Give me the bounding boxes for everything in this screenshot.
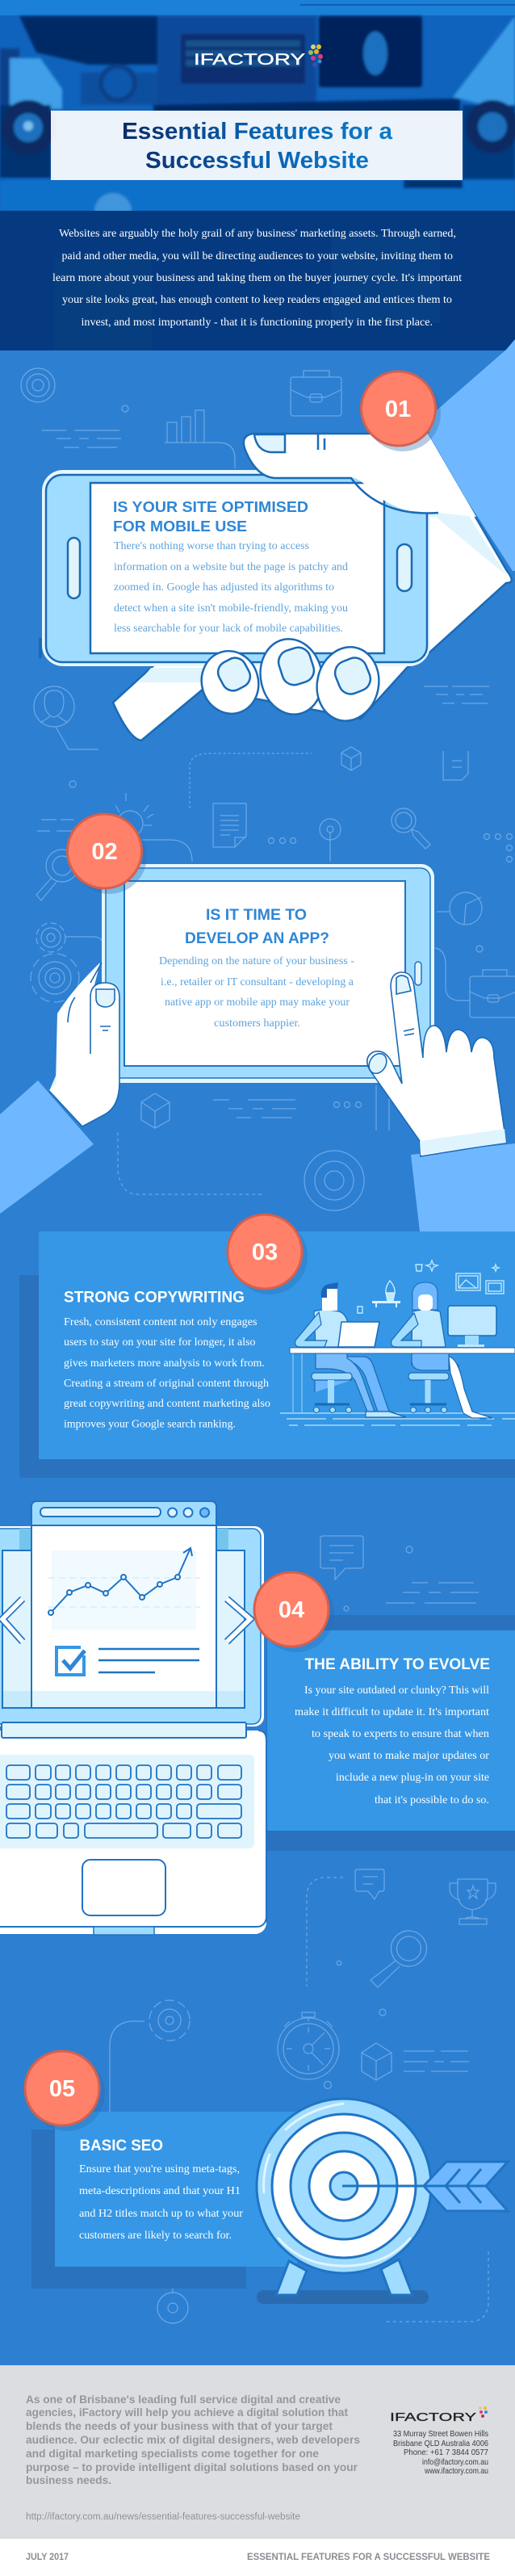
keyboard [0,1755,254,1848]
person: man with laptop [295,1282,406,1417]
intro band: invest, and most importantly - that it is functioning properly in the first place. [81,316,433,328]
text: copywriting body: improves your Google search ranking. [64,1418,236,1429]
hand: left [49,963,119,1126]
heading: app [185,907,329,947]
text: about ifactory: purpose – to provide intelligent digital solutions based on your [26,2461,358,2473]
logo: iFactory footer: IFACTORY [390,2410,476,2424]
text: app body: customers happier. [214,1017,300,1029]
title box: Essential Features for a [122,119,393,145]
badge 01: 01 [385,396,411,422]
fingers [195,633,386,727]
intro band: paid and other media, you will be directing audiences to your website, inviting them to [61,250,453,262]
hand: right [366,972,506,1156]
tablet [102,864,434,1083]
text: copywriting body: Fresh, consistent content not only engages [64,1315,257,1328]
text: copywriting body: great copywriting and content marketing also [64,1397,270,1409]
heading: app: DEVELOP AN APP? [185,930,329,947]
badge 05: 05 [49,2076,75,2102]
title box: Successful Website [145,148,369,174]
panel: strong copywriting [19,1215,515,1478]
text: contact details [393,2429,488,2476]
section 4 background icons [320,1536,479,1611]
text: mobile body: less searchable for your lack of mobile capabilities. [114,622,343,634]
text: seo body: customers are likely to search for. [79,2229,232,2241]
sleeve: right [411,1143,515,1231]
text: evolve body [295,1684,490,1806]
desk [290,1348,515,1353]
text: source url: http://ifactory.com.au/news/essential-features-successful-website [26,2512,300,2522]
panel: develop an app [0,814,515,1231]
intro band: learn more about your business and taking them on the buyer journey cycle. It's important [52,271,462,283]
text: about ifactory: blends the needs of your business with that of your target [26,2419,333,2432]
text: evolve body: include a new plug-in on your site [336,1771,489,1783]
text: contact details: 33 Murray Street Bowen Hills [393,2429,488,2439]
text: contact details: Phone: +61 7 3844 0577 [404,2448,488,2457]
title box [51,111,463,180]
panel: ability to evolve [266,1615,515,1851]
badge 03 [228,1215,308,1294]
text: copywriting body: Creating a stream of original content through [64,1377,269,1389]
text: about ifactory [26,2393,360,2486]
section 1 background icons [21,368,489,780]
text: evolve body: Is your site outdated or clunky? This will [304,1684,489,1696]
icon: target with arrow [257,2099,508,2304]
text: seo body: Ensure that you're using meta-tags, [79,2163,240,2175]
text: app body: i.e., retailer or IT consultant - developing a [161,975,354,988]
section 2 background icons [31,753,515,1210]
badge 02: 02 [91,839,118,865]
text: evolve body: that it's possible to do so. [375,1794,489,1806]
phone [39,470,430,666]
intro band: Websites are arguably the holy grail of any business' marketing assets. Through earned, [59,227,456,239]
text: copywriting body: gives marketers more analysis to work from. [64,1357,265,1369]
checklist [57,1647,199,1675]
text: mobile body: detect when a site isn't mobile-friendly, making you [114,602,348,614]
heading: app: IS IT TIME TO [206,907,307,924]
logo: iFactory header [194,44,323,69]
text: seo body [79,2163,244,2241]
illustration: two people at a desk [280,1261,515,1425]
text: date: JULY 2017 [26,2551,69,2562]
text: copywriting body [64,1315,270,1429]
intro band: your site looks great, has enough content to keep readers engaged and entices them to [62,293,452,305]
badge 05 [25,2051,105,2131]
text: evolve body: to speak to experts to ensure that when [312,1727,489,1739]
text: app body: native app or mobile app may make your [165,996,350,1008]
badge 04: 04 [278,1597,304,1623]
text: about ifactory: and digital marketing specialists come together for one [26,2447,319,2460]
line chart [48,1548,200,1630]
thumb: top [244,434,476,517]
logo: iFactory footer [390,2406,488,2424]
hinge [2,1722,246,1738]
text: about ifactory: business needs. [26,2473,111,2486]
logo: iFactory header: IFACTORY [194,52,305,69]
heading: copywriting: STRONG COPYWRITING [64,1289,245,1307]
text: contact details: www.ifactory.com.au [424,2466,488,2476]
text: evolve body: you want to make major updates or [329,1749,490,1761]
badge 04 [254,1572,334,1652]
text: footer title: ESSENTIAL FEATURES FOR A SUCCESSFUL WEBSITE [247,2551,490,2562]
text: seo body: and H2 titles match up to what your [79,2207,244,2219]
icon: browser window [31,1501,216,1708]
text: mobile body: There's nothing worse than trying to access [114,539,309,552]
heading: seo: BASIC SEO [79,2138,163,2154]
text: app body: Depending on the nature of your business - [159,954,355,967]
text: mobile body [114,539,348,634]
icon: plant and shelf [372,1281,400,1307]
text: mobile body: zoomed in. Google has adjusted its algorithms to [114,581,334,593]
heading: evolve: THE ABILITY TO EVOLVE [305,1656,490,1673]
sleeve: top right [427,339,515,571]
text: contact details: info@ifactory.com.au [422,2457,488,2467]
hand: holding phone [113,434,512,740]
badge 01 [362,371,441,451]
text: app body [159,954,355,1029]
icon: picture frames and sparkles [358,1261,504,1313]
badge 03: 03 [252,1240,278,1265]
panel: basic seo [25,2051,508,2304]
intro band [0,211,515,350]
text: contact details: Brisbane QLD Australia 4006 [393,2439,488,2448]
person: woman with monitor [391,1282,496,1418]
heading: mobile: FOR MOBILE USE [113,518,247,535]
laptop base [0,1731,266,1935]
panel: mobile optimisation [39,339,515,740]
sleeve: left [0,1080,94,1214]
section 5 background icons [110,1869,496,2323]
footer panel [0,2365,515,2576]
text: about ifactory: audience. Our eclectic mix of digital designers, web developers [26,2433,360,2446]
text: about ifactory: agencies, iFactory will help you achieve a digital solution that [26,2406,348,2419]
header photo [0,0,515,230]
text: evolve body: make it difficult to update it. It's important [295,1705,489,1718]
text: about ifactory: As one of Brisbane's leading full service digital and creative [26,2393,341,2406]
arrow: chevrons [2,1599,250,1642]
text: seo body: meta-descriptions and that your H1 [79,2184,241,2196]
laptop illustration [0,1501,334,1935]
laptop lid [0,1526,264,1726]
text: mobile body: information on a website but the page is patchy and [114,560,348,573]
badge 02 [68,814,147,894]
heading: mobile [113,498,308,535]
text: copywriting body: users to stay on your site for longer, it also [64,1336,256,1348]
heading: mobile: IS YOUR SITE OPTIMISED [113,498,308,515]
